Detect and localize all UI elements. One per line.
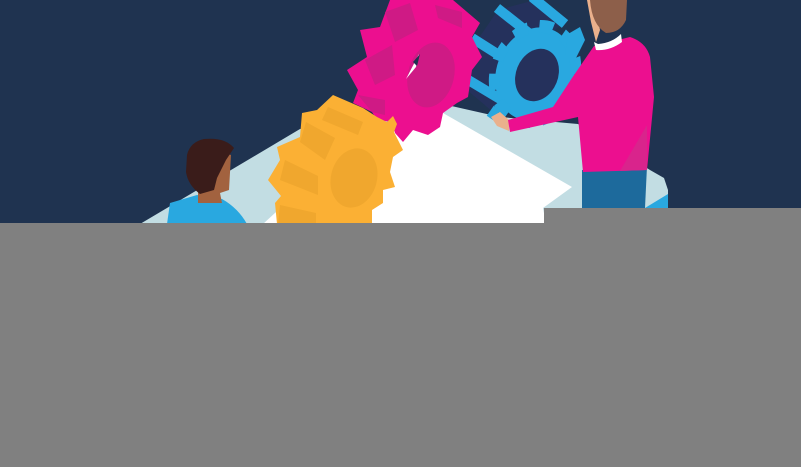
recessed darker patches [358,3,462,115]
hair [590,0,627,33]
icon: magenta gear [347,0,482,142]
hand [491,112,509,131]
white sheet on platform [263,113,572,224]
recessed darker patches [278,107,384,224]
neck and face edge [587,0,600,42]
jeans [582,166,647,208]
collar [594,34,622,50]
person: man in blue shirt [167,139,247,224]
icon: blue gear [465,0,589,133]
platform: light blue isometric table [140,105,668,224]
hair [186,139,234,194]
icon: yellow gear [268,95,403,224]
neck and face [198,150,231,203]
grey cover block: lower band [0,223,801,467]
grey cover block: right notch [544,208,801,224]
blue gear right tooth [565,27,585,62]
sweater [508,37,654,172]
shirt [167,195,247,224]
dark navy background [0,0,801,224]
slit showing white [406,54,419,79]
person: man in magenta sweater [491,0,654,208]
